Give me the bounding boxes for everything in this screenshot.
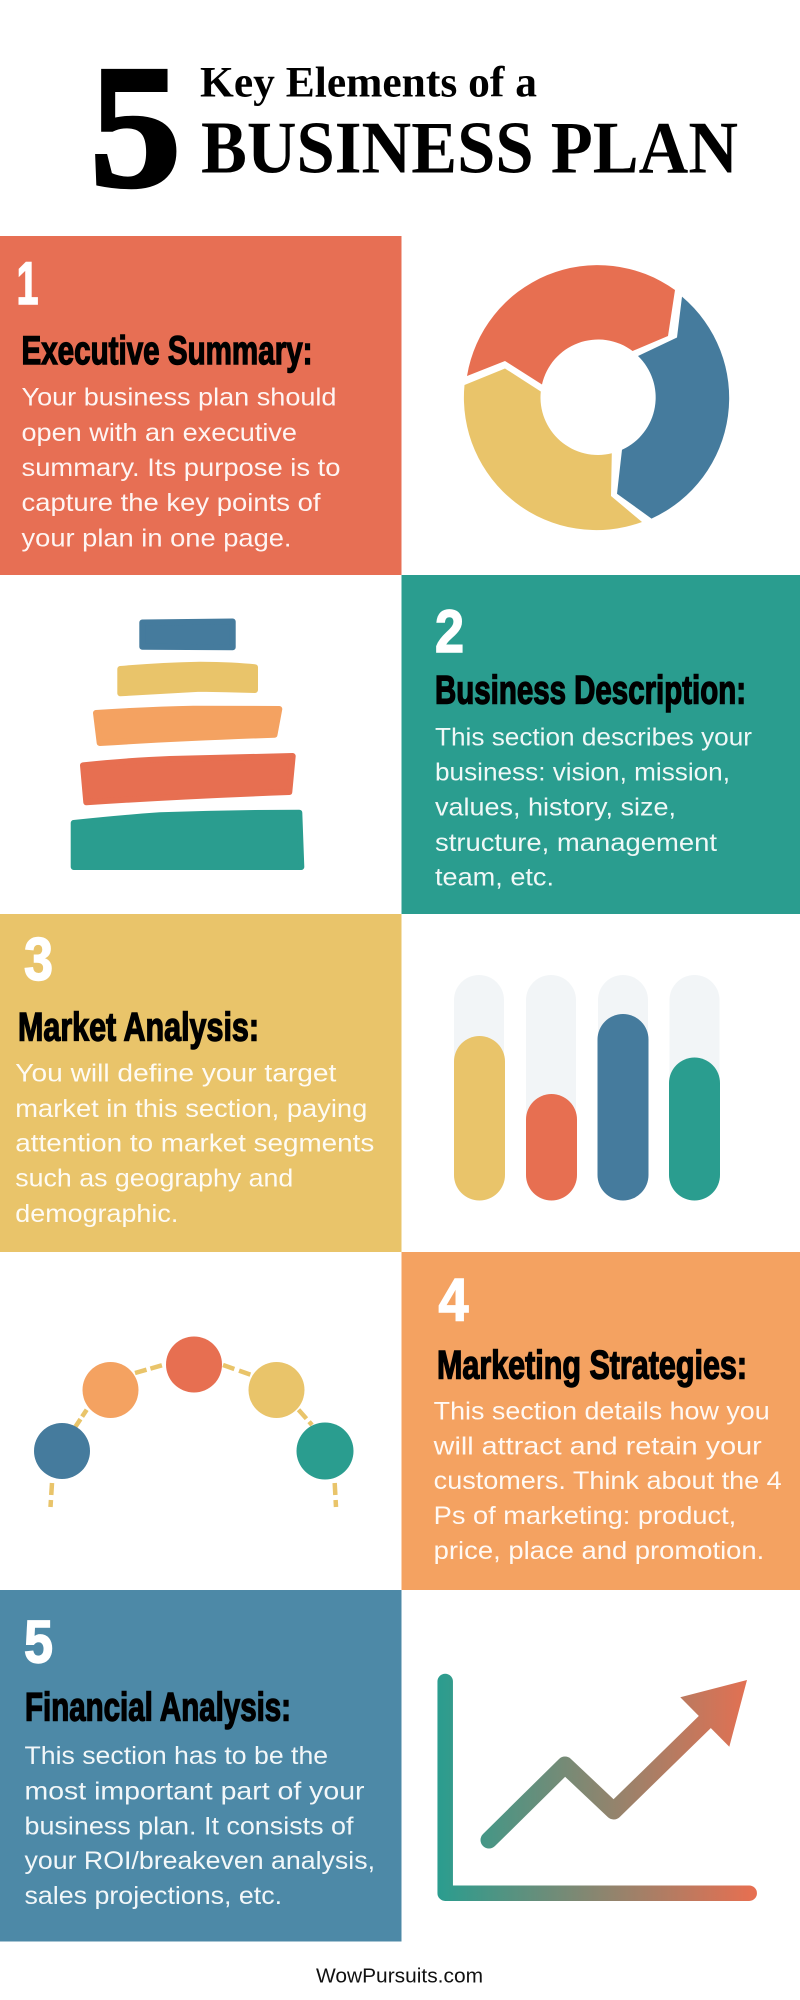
stacked pyramid icon <box>74 622 301 867</box>
body text <box>433 1397 782 1565</box>
body text: open with an executive <box>22 419 297 447</box>
number 3: 3 <box>24 926 53 993</box>
title <box>90 30 738 224</box>
bar: red <box>526 1094 577 1200</box>
number 1: 1 <box>16 250 38 317</box>
body text: team, etc. <box>435 864 554 892</box>
body text: You will define your target <box>15 1060 336 1088</box>
title line: Key Elements of a: Key Elements of a <box>200 60 537 106</box>
panel 1: executive summary <box>0 236 402 575</box>
body text: price, place and promotion. <box>434 1537 764 1565</box>
body text: your ROI/breakeven analysis, <box>24 1847 375 1875</box>
body text: structure, management <box>435 829 717 857</box>
body text <box>22 384 340 552</box>
footer: website: WowPursuits.com <box>316 1966 483 1988</box>
title line: BUSINESS PLAN: BUSINESS PLAN <box>201 108 738 190</box>
number 2: 2 <box>435 598 464 665</box>
body text: values, history, size, <box>435 794 676 822</box>
body text: will attract and retain your <box>433 1432 762 1460</box>
bar: yellow <box>454 1036 505 1200</box>
number 5: 5 <box>24 1608 53 1676</box>
body text: attention to market segments <box>15 1130 374 1158</box>
progress bars chart <box>454 975 720 1200</box>
body text <box>24 1742 375 1910</box>
body text: Ps of marketing: product, <box>434 1502 736 1530</box>
bar: blue <box>598 1014 648 1200</box>
panel 2: business description <box>402 575 800 914</box>
panel 3: market analysis <box>0 914 402 1252</box>
panel 4: marketing strategies <box>402 1252 800 1590</box>
rising trend line <box>489 1715 712 1840</box>
title numeral 5: 5 <box>90 30 181 224</box>
body text: most important part of your <box>24 1777 364 1805</box>
body text <box>15 1060 374 1228</box>
body text: customers. Think about the 4 <box>434 1467 782 1495</box>
body text: summary. Its purpose is to <box>22 454 340 482</box>
chart axes <box>445 1682 749 1893</box>
panel 5: financial analysis <box>0 1590 402 1942</box>
bar: teal <box>669 1058 720 1200</box>
body text: This section has to be the <box>24 1742 328 1770</box>
heading: Financial Analysis: Financial Analysis: <box>25 1686 291 1730</box>
heading: Executive Summary: Executive Summary: <box>22 329 312 373</box>
body text: Your business plan should <box>22 384 336 412</box>
body text: sales projections, etc. <box>24 1882 282 1910</box>
body text: This section details how you <box>434 1397 770 1425</box>
body text: business: vision, mission, <box>435 759 730 787</box>
arrow head <box>680 1680 747 1747</box>
body text: market in this section, paying <box>15 1095 367 1123</box>
heading: Market Analysis: Market Analysis: <box>18 1006 259 1050</box>
body text: your plan in one page. <box>22 524 292 552</box>
body text <box>435 723 752 892</box>
body text: This section describes your <box>435 723 752 751</box>
growth line chart icon <box>445 1680 749 1893</box>
number 4: 4 <box>438 1266 469 1334</box>
donut chart icon <box>464 265 729 530</box>
body text: such as geography and <box>15 1164 293 1192</box>
arc of circles timeline icon <box>34 1336 354 1507</box>
body text: demographic. <box>15 1200 178 1228</box>
body text: business plan. It consists of <box>24 1812 354 1840</box>
body text: capture the key points of <box>22 489 321 517</box>
